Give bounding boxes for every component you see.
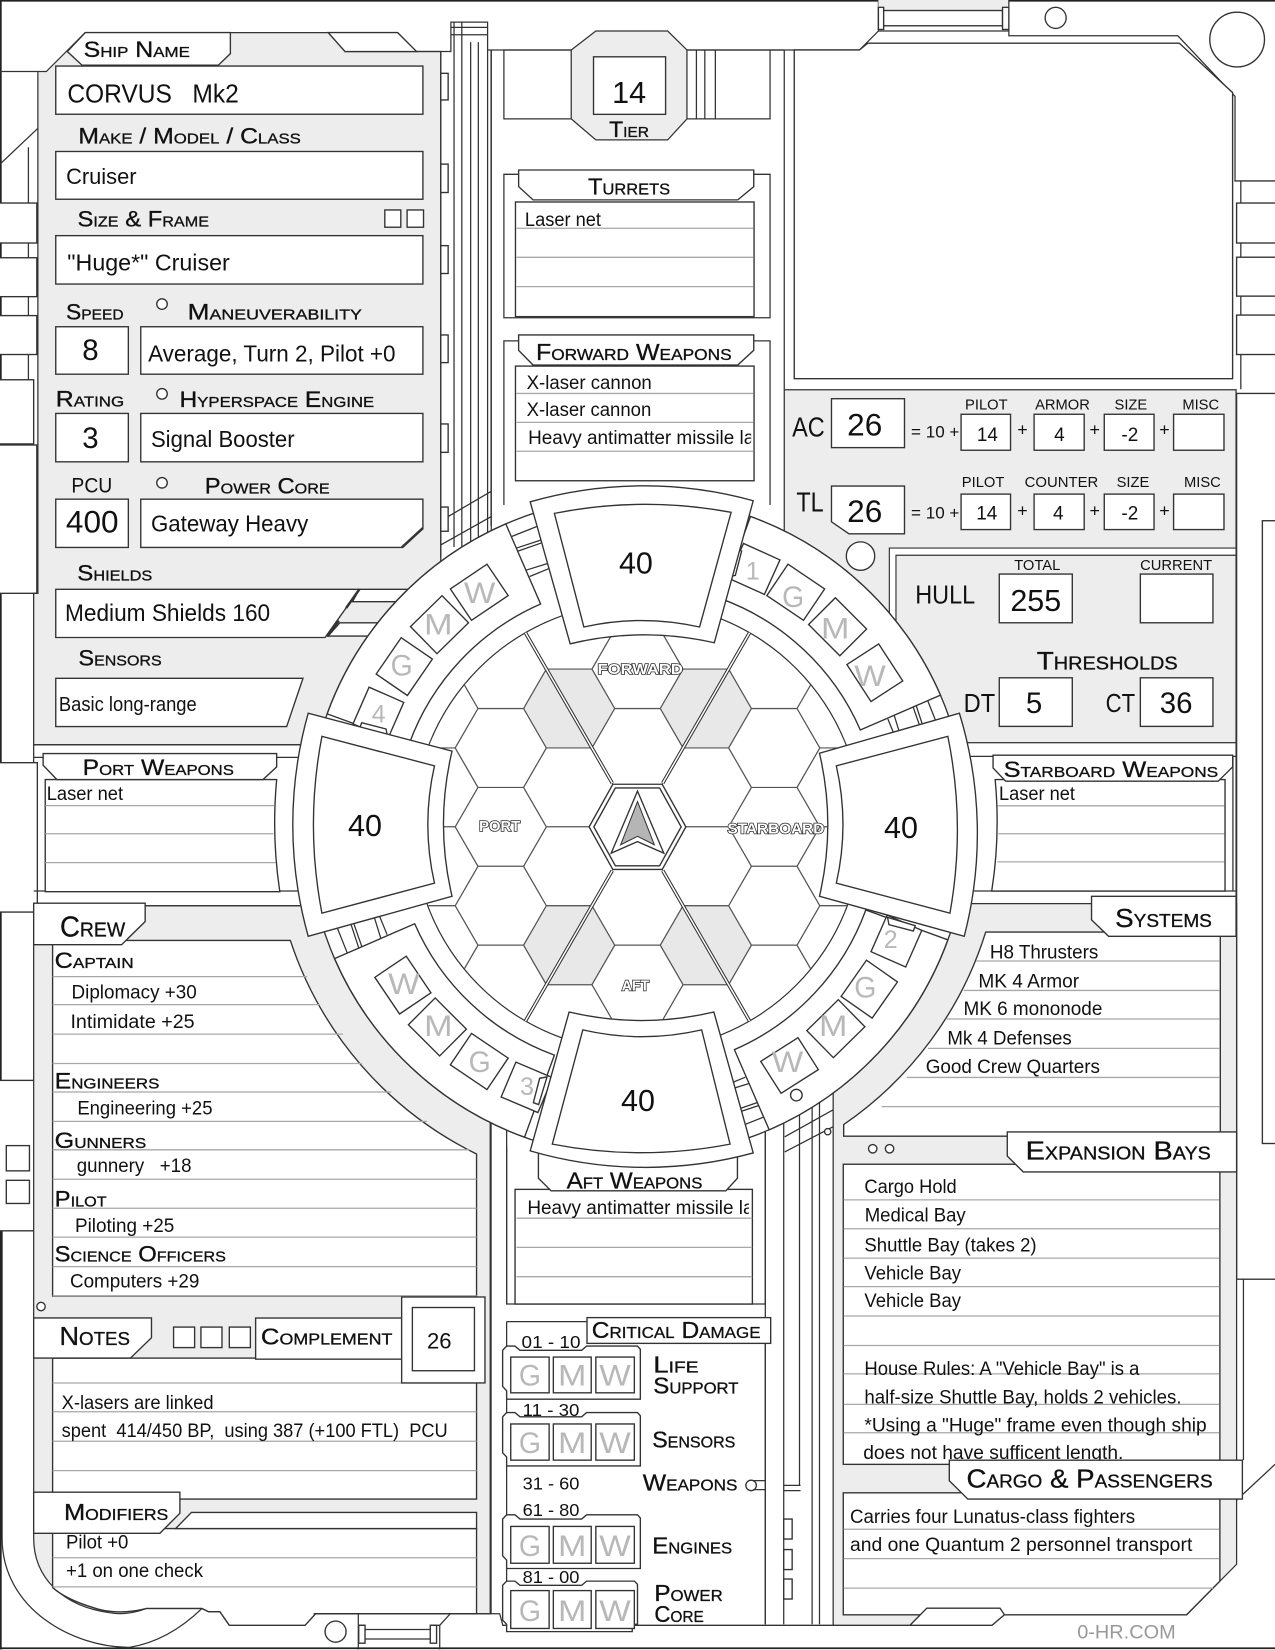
panel: center column frame — [491, 50, 784, 526]
panel: hull and thresholds: 255 — [1010, 584, 1061, 618]
text: systems list: H8 Thrusters — [990, 943, 1098, 964]
field: speed — [56, 300, 128, 374]
tab: systems: Systems — [1115, 903, 1212, 933]
text: expansion bay list: Medical Bay — [865, 1206, 966, 1227]
tab: cargo and passengers: Cargo & Passengers — [966, 1464, 1213, 1494]
stat row: target lock: -2 — [1121, 504, 1138, 525]
shield panel: aft: 40 — [621, 1084, 655, 1118]
tier badge: Tier — [609, 117, 649, 142]
stat row: armor class: 4 — [1054, 425, 1065, 446]
critical row: weapons: 31 - 60 — [523, 1474, 579, 1494]
panel: ac and tl stats background — [784, 390, 1236, 743]
stat row: target lock: + — [1159, 501, 1170, 521]
critical row: sensors — [503, 1400, 735, 1466]
panel: notes: spent 414/450 BP, using 387 (+100 FTL) PCU — [62, 1421, 448, 1442]
panel: aft weapons — [507, 1126, 765, 1304]
panel: aft weapons: Heavy antimatter missile la — [527, 1198, 754, 1219]
tier badge: 14 — [612, 76, 646, 110]
tab: systems — [1092, 896, 1236, 936]
stat row: target lock — [796, 475, 1224, 534]
field: size and frame — [56, 207, 424, 284]
critical row: engines: W — [599, 1530, 631, 1563]
text: crew roster: Piloting +25 — [75, 1216, 174, 1237]
panel: forward weapons: Forward Weapons — [536, 339, 732, 365]
field: ship name: CORVUS Mk2 — [67, 78, 239, 108]
tiles: forward port arc — [353, 564, 508, 739]
ring base disk — [307, 497, 968, 1157]
stat row: armor class: -2 — [1121, 425, 1138, 446]
stat row: armor class: MISC — [1182, 398, 1219, 414]
hex labels: PORT — [479, 819, 520, 835]
text: systems list: MK 6 mononode — [964, 999, 1102, 1020]
critical row: sensors: Sensors — [652, 1427, 735, 1453]
text: expansion bay list: Vehicle Bay — [864, 1291, 961, 1312]
field: speed: 8 — [82, 334, 99, 367]
field: hyperspace engine: Hyperspace Engine — [180, 387, 374, 412]
panel: forward weapons: X-laser cannon — [527, 373, 652, 394]
critical row: power core: M — [558, 1595, 586, 1628]
text: crew roster: Engineering +25 — [77, 1099, 212, 1120]
stat row: armor class — [792, 398, 1224, 450]
critical row: sensors: M — [558, 1427, 586, 1460]
field: shields: Medium Shields 160 — [65, 600, 270, 627]
critical row: sensors: 11 - 30 — [523, 1400, 579, 1420]
field: sensors — [56, 646, 303, 727]
panel: turrets — [504, 170, 770, 318]
stat row: armor class: + — [1159, 420, 1170, 440]
critical row: weapons — [523, 1470, 765, 1496]
tiles: aft starboard arc: 2 — [884, 926, 898, 954]
field: maneuverability: Average, Turn 2, Pilot +0 — [148, 340, 396, 366]
panel: aft weapons: Aft Weapons — [567, 1167, 702, 1193]
text: crew roster: Science Officers — [55, 1241, 226, 1266]
panel: cargo and passengers: and one Quantum 2 personnel transport — [850, 1535, 1193, 1556]
text: crew roster: Captain — [55, 948, 134, 973]
tiles: forward port arc: 4 — [372, 701, 386, 729]
critical row: engines: G — [519, 1530, 541, 1563]
segment: forward starboard — [721, 517, 940, 730]
tiles: forward starboard arc — [728, 543, 903, 702]
critical row: life support: M — [558, 1359, 586, 1392]
watermark: 0-HR.COM — [1077, 1623, 1176, 1644]
text: expansion bay list: half-size Shuttle Bay, holds 2 vehicles. — [864, 1387, 1182, 1408]
critical row: engines: Engines — [652, 1532, 732, 1558]
tab: crew: Crew — [60, 911, 125, 943]
critical row: power core: Core — [654, 1601, 704, 1627]
text: crew roster: Intimidate +25 — [70, 1012, 195, 1033]
tiles: forward port arc: W — [464, 577, 496, 610]
field: maneuverability: Maneuverability — [188, 300, 362, 325]
critical row: power core: W — [599, 1595, 631, 1628]
hex labels: AFT — [622, 978, 649, 994]
segment: aft port — [335, 924, 554, 1137]
field: size and frame: Size & Frame — [78, 207, 209, 232]
panel: ship identity background — [34, 33, 441, 745]
field: sensors: Sensors — [78, 646, 162, 671]
complement label and value: 26 — [427, 1329, 452, 1354]
panel: hull and thresholds: CT — [1106, 688, 1135, 718]
critical row: life support: Support — [653, 1373, 739, 1399]
stat row: target lock: 26 — [847, 493, 882, 529]
center hex and ship icon — [589, 784, 686, 869]
critical row: engines: 61 - 80 — [523, 1500, 579, 1520]
field: pcu: 400 — [66, 504, 119, 540]
tiles: forward port arc: G — [391, 649, 413, 682]
panel: port weapons — [43, 754, 280, 892]
critical row: weapons: Weapons — [643, 1470, 737, 1496]
panel: lower left gray background — [34, 906, 490, 1625]
portrait frame — [794, 43, 1233, 379]
panel: modifiers: +1 on one check — [66, 1561, 204, 1582]
field: make model class: Cruiser — [66, 164, 137, 189]
panel: hull and thresholds — [889, 548, 1236, 726]
text: crew roster: Pilot — [55, 1187, 107, 1212]
critical row: sensors: W — [599, 1427, 631, 1460]
panel: hull and thresholds: HULL — [915, 579, 975, 609]
tab: notes — [34, 1318, 151, 1358]
tab: modifiers: Modifiers — [64, 1499, 168, 1525]
field: make model class — [56, 124, 423, 199]
panel: starboard weapons — [947, 743, 1236, 904]
stat row: target lock: + — [1090, 501, 1100, 521]
indicator circle — [846, 542, 875, 570]
tiles: aft port arc: G — [469, 1046, 491, 1079]
tab: notes: Notes — [59, 1321, 130, 1351]
text: expansion bay list — [863, 1177, 1207, 1464]
stat row: target lock: SIZE — [1117, 475, 1150, 491]
panel: hull and thresholds: DT — [964, 688, 995, 718]
tab: cargo and passengers — [949, 1460, 1242, 1499]
tiles: aft starboard arc: W — [772, 1046, 804, 1079]
field: rating: Rating — [56, 386, 124, 411]
tab: ship name — [67, 33, 230, 65]
panel: turrets: Turrets — [588, 173, 670, 199]
stat row: armor class: + — [1090, 420, 1100, 440]
stat row: target lock: + — [1017, 501, 1028, 521]
text: expansion bay list: House Rules: A "Vehicle Bay" is a — [864, 1359, 1140, 1380]
tab: modifiers — [34, 1492, 180, 1533]
field: rating — [56, 386, 128, 462]
text: crew roster — [55, 948, 226, 1293]
tab: crew — [34, 903, 145, 945]
critical row: engines: M — [558, 1530, 586, 1563]
field: shields: Shields — [77, 561, 152, 586]
segment: aft starboard — [734, 910, 948, 1130]
text: crew roster: Engineers — [55, 1069, 159, 1094]
field: rating: 3 — [82, 422, 99, 455]
panel: hull and thresholds: TOTAL — [1014, 558, 1060, 574]
panel: forward weapons: Heavy antimatter missile la — [528, 428, 755, 449]
text: expansion bay list: Cargo Hold — [864, 1177, 957, 1198]
stat row: armor class: 14 — [977, 425, 998, 446]
critical row: life support — [503, 1332, 739, 1399]
panel: port weapons: Port Weapons — [83, 755, 234, 780]
text: expansion bay list: Vehicle Bay — [864, 1264, 961, 1285]
text: expansion bay list: *Using a "Huge" frame even though ship — [864, 1416, 1207, 1437]
panel: expansion bays — [843, 1164, 1220, 1464]
critical row: power core: G — [519, 1595, 541, 1628]
tiles: aft starboard arc: M — [819, 1010, 847, 1043]
text: crew roster: Gunners — [55, 1128, 146, 1153]
complement label and value — [256, 1297, 485, 1383]
stat row: target lock: COUNTER — [1025, 475, 1098, 491]
panel: crew list — [53, 940, 477, 1296]
critical row: life support: W — [599, 1359, 631, 1392]
panel: turrets: Laser net — [525, 210, 602, 231]
panel: forward weapons — [504, 335, 770, 505]
field: power core: Power Core — [205, 473, 330, 498]
complement label and value: Complement — [261, 1323, 393, 1349]
panel: starboard weapons: Starboard Weapons — [1004, 757, 1218, 782]
column tabs and conduit lines — [417, 0, 878, 558]
tab: expansion bays: Expansion Bays — [1026, 1135, 1211, 1165]
panel: hull and thresholds: CURRENT — [1140, 558, 1212, 574]
field: size and frame: "Huge*" Cruiser — [67, 249, 230, 275]
bottom connector bar — [313, 1614, 910, 1650]
field: power core: Gateway Heavy — [151, 510, 309, 536]
field: shields — [56, 561, 416, 638]
critical row: power core: Power — [654, 1580, 723, 1606]
hex labels: STARBOARD — [728, 822, 825, 838]
panel: lower right gray background — [833, 904, 1237, 1625]
critical row: engines — [503, 1500, 732, 1569]
stat row: target lock: TL — [796, 486, 824, 517]
stat row: target lock: MISC — [1184, 475, 1221, 491]
top edge decoration — [878, 0, 1275, 389]
tiles: aft port arc — [375, 956, 553, 1113]
tier badge — [571, 31, 687, 142]
field: hyperspace engine: Signal Booster — [151, 426, 295, 452]
shield ring diagram — [293, 486, 977, 1167]
tiles: forward starboard arc: W — [854, 660, 886, 693]
stat row: target lock: = 10 + — [911, 504, 959, 523]
critical row: life support: 01 - 10 — [522, 1332, 581, 1352]
field: sensors: Basic long-range — [59, 694, 197, 716]
stat row: target lock: PILOT — [962, 475, 1004, 491]
tiles: forward starboard arc: G — [782, 581, 804, 614]
checkboxes: notes — [174, 1327, 250, 1348]
field: pcu: PCU — [71, 475, 112, 498]
panel: hull and thresholds: 36 — [1160, 687, 1192, 720]
critical row: sensors: G — [519, 1427, 541, 1460]
stat row: target lock: 4 — [1053, 504, 1064, 525]
text: expansion bay list: does not have sufficent length. — [863, 1443, 1123, 1464]
field: hyperspace engine — [141, 387, 423, 462]
sector dividers — [525, 633, 750, 1021]
hex disk circle — [413, 603, 862, 1051]
tiles: aft port arc: 3 — [520, 1073, 534, 1101]
panel: critical damage — [503, 1317, 771, 1632]
tiles: forward starboard arc: 1 — [746, 558, 760, 586]
tiles: forward starboard arc: M — [821, 613, 849, 646]
stat row: armor class: ARMOR — [1035, 398, 1090, 414]
shield panel: forward — [530, 486, 753, 644]
text: systems list — [926, 943, 1102, 1078]
panel: forward weapons: X-laser cannon — [527, 400, 651, 421]
field: maneuverability — [141, 299, 423, 374]
stat row: target lock: 14 — [976, 504, 997, 525]
critical row: life support: G — [519, 1359, 541, 1392]
field: speed: Speed — [66, 300, 124, 325]
text: crew roster: gunnery +18 — [77, 1156, 191, 1177]
tiles: aft starboard arc — [761, 915, 922, 1093]
critical row: power core — [503, 1567, 723, 1632]
conduit lines — [491, 1094, 833, 1624]
critical row: life support: Life — [653, 1351, 699, 1377]
panel: port weapons: Laser net — [47, 784, 124, 805]
tiles: forward port arc: M — [424, 608, 453, 641]
tab: expansion bays — [1007, 1132, 1237, 1172]
stat row: armor class: SIZE — [1115, 398, 1147, 414]
tiles: aft port arc: W — [388, 968, 420, 1001]
right edge decoration — [1237, 203, 1275, 1500]
panel: modifiers — [53, 1512, 477, 1625]
text: systems list: Mk 4 Defenses — [947, 1028, 1072, 1049]
ring connector stripes — [337, 527, 938, 1127]
tab: ship name: Ship Name — [84, 37, 190, 62]
text: expansion bay list: Shuttle Bay (takes 2) — [864, 1236, 1037, 1257]
shield panel: starboard — [819, 713, 977, 936]
shield panel: starboard: 40 — [884, 811, 918, 845]
indicator circle — [791, 1089, 802, 1101]
text: crew roster: Diplomacy +30 — [72, 982, 197, 1003]
stat row: armor class: 26 — [847, 407, 882, 443]
stat row: armor class: AC — [792, 412, 825, 443]
tab: critical damage title: Critical Damage — [592, 1317, 761, 1343]
segment: forward port — [327, 524, 541, 744]
text: systems list: Good Crew Quarters — [926, 1057, 1100, 1078]
shield panel: port — [293, 713, 452, 936]
panel: starboard weapons: Laser net — [999, 784, 1076, 805]
panel: notes — [53, 1358, 477, 1499]
tab: upper decorative — [328, 33, 417, 52]
shield panel: aft — [530, 1012, 753, 1167]
left edge hull decoration — [0, 72, 202, 1647]
panel: notes: X-lasers are linked — [62, 1393, 214, 1414]
text: systems list: MK 4 Armor — [978, 971, 1079, 992]
panel: cargo and passengers: Carries four Lunatus-class fighters — [850, 1507, 1135, 1528]
stat row: armor class: + — [1017, 420, 1028, 440]
shield panel: forward: 40 — [619, 546, 653, 580]
panel: systems — [844, 932, 1220, 1136]
shield panel: port: 40 — [348, 809, 382, 843]
panel: hull and thresholds: Thresholds — [1037, 648, 1178, 676]
field: make model class: Make / Model / Class — [78, 124, 301, 149]
indicator circles — [869, 1145, 894, 1153]
text: crew roster: Computers +29 — [70, 1272, 199, 1293]
stat row: armor class: = 10 + — [911, 423, 959, 442]
panel mount notches — [360, 549, 915, 1105]
tiles: aft starboard arc: G — [854, 971, 876, 1004]
field: ship name — [56, 66, 423, 114]
tiles: aft port arc: M — [424, 1010, 453, 1043]
hex labels: FORWARD — [598, 662, 683, 678]
hex labels — [479, 662, 825, 994]
hex grid — [428, 616, 847, 1037]
panel: cargo and passengers — [843, 1493, 1220, 1625]
panel: hull and thresholds: 5 — [1026, 687, 1042, 720]
panel: modifiers: Pilot +0 — [66, 1533, 128, 1554]
stat row: armor class: PILOT — [965, 398, 1008, 414]
critical row: power core: 81 - 00 — [523, 1567, 579, 1587]
field: pcu — [56, 475, 128, 547]
field: power core — [141, 473, 423, 547]
